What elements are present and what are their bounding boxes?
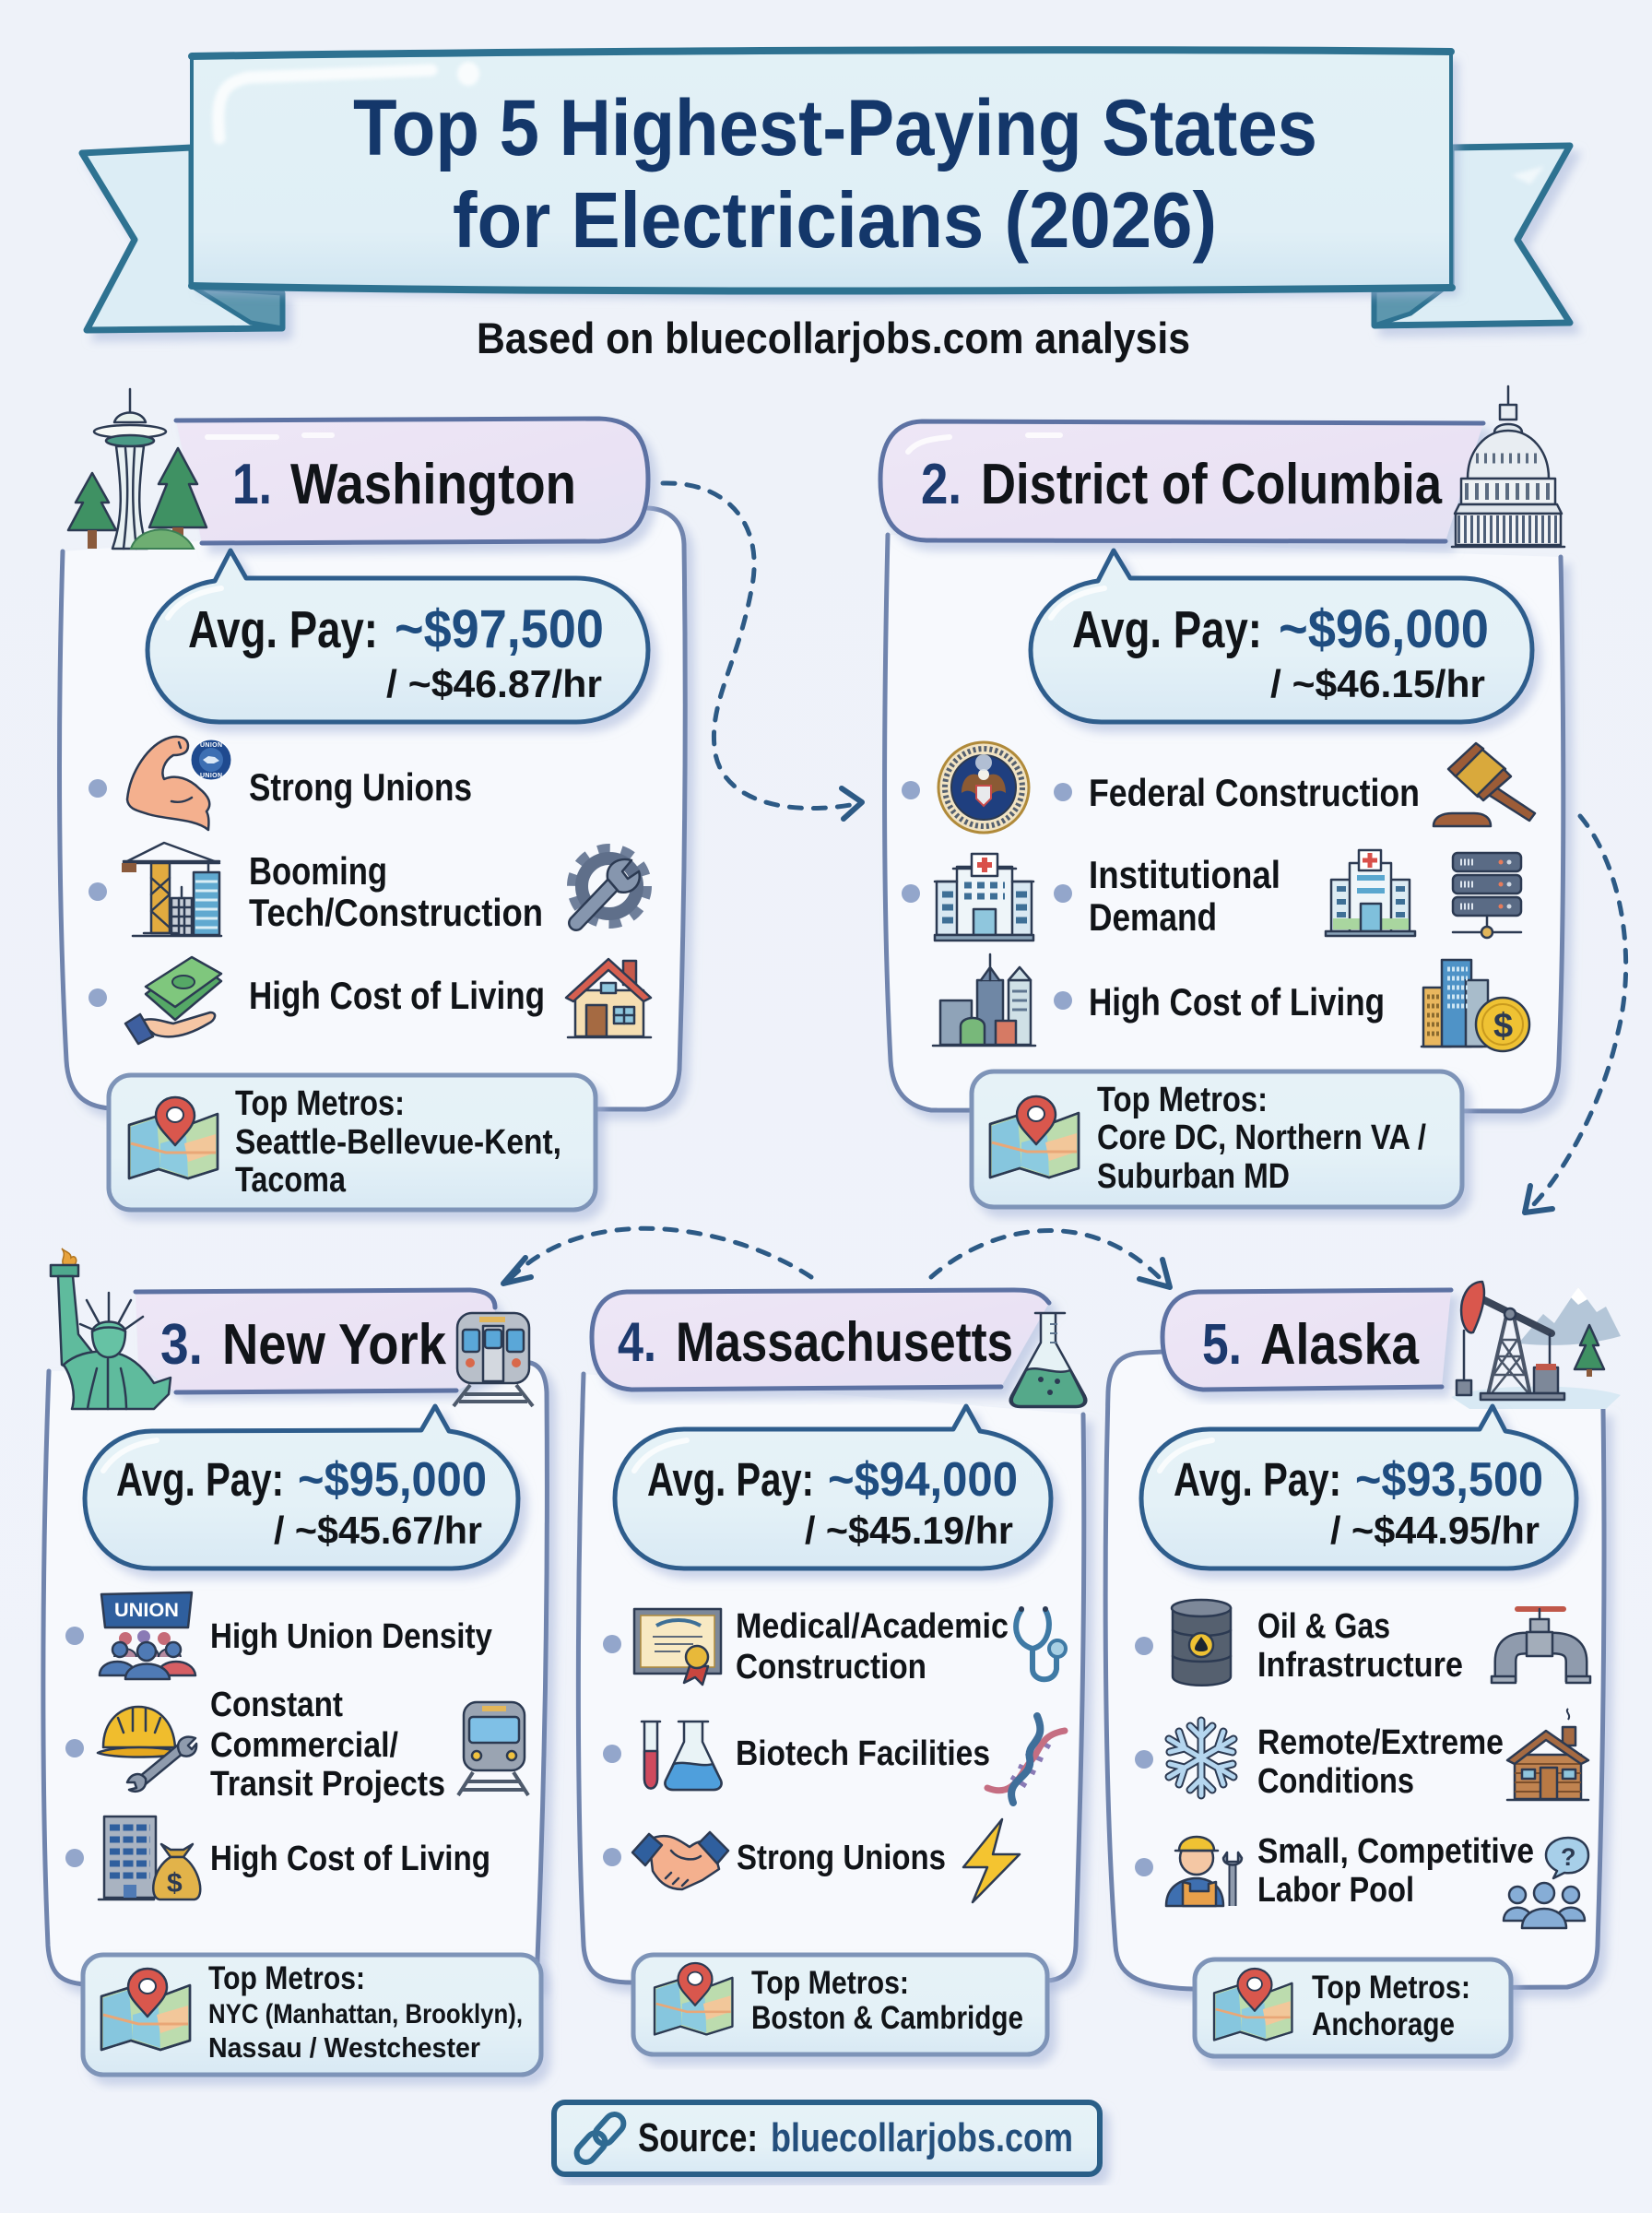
title text: Top 5 Highest-Paying States [353, 84, 1317, 172]
list item: Biotech Facilities [603, 1716, 1065, 1803]
icon: Statue of Liberty [51, 1249, 171, 1409]
metros box: Massachusetts: Boston & Cambridge [751, 2000, 1023, 2036]
list item: Booming Tech/Construction [88, 843, 646, 936]
metros box: District of Columbia: Top Metros: [1097, 1081, 1268, 1119]
subtitle: Based on bluecollarjobs.com analysis [477, 314, 1190, 362]
heading: 2. District of Columbia [880, 421, 1483, 541]
title text [353, 84, 1317, 265]
heading: 3. New York [136, 1290, 495, 1392]
icon: union crowd with banner [100, 1592, 195, 1679]
callout: average pay: Avg. Pay: [116, 1453, 284, 1506]
icon: flexed arm with union badge [127, 737, 231, 830]
icon: office tower and money bag [99, 1817, 200, 1899]
list item: Remote/Extreme Conditions: Conditions [1257, 1762, 1414, 1801]
list item: Institutional Demand: Demand [1089, 895, 1217, 939]
heading: 5. Alaska [1162, 1290, 1451, 1390]
list item: Oil & Gas Infrastructure: Infrastructure [1257, 1646, 1463, 1685]
metros box: District of Columbia [972, 1071, 1462, 1207]
list item: Institutional Demand: Institutional [1089, 853, 1280, 896]
icon: certificate [634, 1609, 721, 1685]
callout: average pay: Avg. Pay: [647, 1453, 814, 1506]
list item: High Union Density [65, 1592, 492, 1679]
list item: Remote/Extreme Conditions: Remote/Extreme [1257, 1723, 1504, 1762]
callout: average pay [1031, 550, 1532, 722]
arrow: rank 2 to rank 3 [1525, 816, 1626, 1213]
heading: 1. Washington [176, 419, 648, 543]
metros box: New York: Top Metros: [208, 1960, 365, 1996]
heading: 4. Massachusetts: Massachusetts [676, 1311, 1013, 1373]
callout: average pay: / ~$45.67/hr [274, 1509, 482, 1552]
icon: house [566, 959, 651, 1037]
icon: buildings and dollar coin [1422, 960, 1529, 1051]
list item: Federal Construction [902, 742, 1535, 833]
metros box: New York: Nassau / Westchester [208, 2031, 480, 2064]
list item: Strong Unions: Strong Unions [249, 765, 472, 809]
list item: Booming Tech/Construction: Booming [249, 849, 387, 893]
icon: map pin [129, 1097, 218, 1178]
callout: average pay [148, 550, 648, 722]
icon: question bubble and people: ? [1561, 1843, 1576, 1871]
list item: Medical/Academic Construction: Construction [736, 1648, 926, 1686]
panel: New York [43, 1249, 547, 2075]
icon: crane and buildings [122, 843, 221, 936]
callout: average pay: Avg. Pay: [1174, 1453, 1341, 1506]
callout: average pay [85, 1406, 518, 1568]
icon: map pin [1214, 1969, 1292, 2040]
list item: Medical/Academic Construction [603, 1606, 1066, 1686]
list item: Booming Tech/Construction: Tech/Construction [249, 891, 543, 934]
list item: Oil & Gas Infrastructure [1135, 1600, 1590, 1686]
callout: average pay [1141, 1406, 1576, 1568]
heading: 4. Massachusetts [592, 1290, 1049, 1390]
icon: flexed arm with union badge: UNION [200, 742, 222, 749]
list item: Strong Unions [603, 1819, 1020, 1902]
arrow: rank 1 to rank 2 [663, 483, 862, 819]
list item: High Cost of Living: High Cost of Living [249, 974, 545, 1017]
heading: 3. New York: New York [222, 1313, 446, 1377]
metros box: Alaska: Anchorage [1312, 2006, 1455, 2042]
icon: map pin [101, 1969, 190, 2050]
icon: lab flask [1010, 1313, 1086, 1407]
list item: Oil & Gas Infrastructure: Oil & Gas [1257, 1607, 1390, 1646]
metros box: Washington: Tacoma [235, 1161, 347, 1200]
list item: Small, Competitive Labor Pool: Labor Pool [1257, 1871, 1414, 1910]
list item: High Cost of Living [933, 954, 1529, 1051]
list item: Federal Construction: Federal Construction [1089, 771, 1420, 814]
icon: pipeline valve [1492, 1609, 1590, 1683]
icon: snowflake [1169, 1721, 1233, 1795]
source footer: bluecollarjobs.com [771, 2115, 1073, 2160]
metros box: District of Columbia: Core DC, Northern VA / [1097, 1118, 1426, 1157]
heading: 1. Washington: 1. [232, 453, 272, 516]
heading: 2. District of Columbia: District of Columbia [981, 453, 1442, 516]
icon: map pin [990, 1096, 1079, 1178]
list item: Institutional Demand [902, 850, 1521, 941]
callout: average pay: Avg. Pay: [1072, 600, 1262, 659]
metros box: Massachusetts [633, 1955, 1047, 2054]
icon: flexed arm with union badge: UNION [200, 773, 222, 779]
callout: average pay [615, 1406, 1051, 1568]
list item: Constant Commercial/Transit Projects: Commercial/ [210, 1726, 398, 1765]
arrow: toward rank 5 [931, 1231, 1170, 1287]
metros box: Washington: Top Metros: [235, 1084, 405, 1123]
list item: Constant Commercial/Transit Projects [65, 1686, 528, 1804]
icon: hospital building [1326, 850, 1415, 936]
list item: Small, Competitive Labor Pool: Small, Competitive [1257, 1832, 1534, 1871]
icon: office tower and money bag: $ [167, 1868, 183, 1899]
icon: gear and wrench [572, 849, 646, 923]
callout: average pay: ~$94,000 [828, 1453, 1018, 1507]
icon: buildings and dollar coin: $ [1493, 1007, 1513, 1046]
icon: question bubble and people [1504, 1838, 1588, 1928]
metros box: Washington: Seattle-Bellevue-Kent, [235, 1123, 561, 1162]
list item: High Cost of Living [65, 1817, 490, 1899]
icon: subway train [454, 1313, 533, 1406]
icon: oil pump and snowy mountains [1451, 1282, 1621, 1409]
list item: Strong Unions [88, 737, 472, 830]
icon: worker with hard hat [1166, 1837, 1242, 1906]
callout: average pay: / ~$46.15/hr [1270, 662, 1485, 705]
icon: oil barrel [1172, 1600, 1231, 1686]
list item: Strong Unions: Strong Unions [737, 1839, 946, 1877]
icon: hard hat and wrench [98, 1707, 196, 1792]
list item: Biotech Facilities: Biotech Facilities [736, 1734, 990, 1773]
icon: handshake [632, 1832, 728, 1889]
metros box: New York: NYC (Manhattan, Brooklyn), [208, 1999, 523, 2030]
heading: 5. Alaska: 5. [1202, 1313, 1242, 1377]
heading: 5. Alaska: Alaska [1260, 1313, 1419, 1377]
icon: cash on open hand [125, 957, 221, 1044]
icon: test tube and beaker [642, 1722, 722, 1790]
list item: High Cost of Living: High Cost of Living [1089, 980, 1385, 1024]
heading: 4. Massachusetts: 4. [618, 1311, 656, 1373]
icon: federal seal [938, 742, 1029, 833]
metros box: Washington [109, 1075, 596, 1210]
metros box: Alaska [1195, 1959, 1511, 2056]
icon: gavel [1434, 743, 1535, 826]
icon: hospital [935, 854, 1033, 941]
metros box: District of Columbia: Suburban MD [1097, 1157, 1290, 1196]
callout: average pay: ~$93,500 [1355, 1453, 1543, 1507]
callout: average pay: / ~$45.19/hr [805, 1509, 1013, 1552]
source footer [554, 2102, 1100, 2174]
panel: Alaska [1105, 1282, 1621, 2056]
callout: average pay: / ~$44.95/hr [1330, 1509, 1540, 1552]
icon: Capitol dome [1452, 386, 1564, 547]
panel: Massachusetts [578, 1290, 1086, 2054]
source footer: Source: [638, 2115, 758, 2160]
arrow: toward rank 3 [503, 1228, 811, 1284]
list item: High Cost of Living: High Cost of Living [210, 1840, 490, 1878]
heading: 3. New York: 3. [160, 1313, 203, 1377]
list item: Remote/Extreme Conditions [1135, 1709, 1588, 1801]
callout: average pay: / ~$46.87/hr [386, 662, 602, 705]
list item: High Union Density: High Union Density [210, 1617, 492, 1656]
icon: Space Needle and trees [68, 389, 206, 549]
icon: map pin [655, 1963, 732, 2034]
panel: District of Columbia [880, 386, 1564, 1207]
callout: average pay: ~$95,000 [298, 1453, 487, 1507]
icon: log cabin [1507, 1709, 1588, 1800]
icon: commuter train [458, 1702, 528, 1795]
list item: Small, Competitive Labor Pool [1135, 1832, 1588, 1928]
metros box: Alaska: Top Metros: [1312, 1970, 1470, 2006]
metros box: Massachusetts: Top Metros: [751, 1965, 909, 2001]
callout: average pay: Avg. Pay: [188, 600, 378, 659]
callout: average pay: ~$97,500 [395, 599, 604, 659]
heading: 2. District of Columbia: 2. [921, 453, 962, 516]
list item: Constant Commercial/Transit Projects: Constant [210, 1686, 343, 1724]
list item: High Cost of Living [88, 957, 651, 1044]
icon: lightning bolt [963, 1819, 1020, 1902]
icon: server rack [1453, 853, 1521, 938]
icon: union crowd with banner: UNION [114, 1600, 179, 1621]
heading: 1. Washington: Washington [290, 453, 576, 516]
title text: for Electricians (2026) [453, 177, 1217, 265]
title ribbon banner [82, 50, 1570, 330]
list item: Medical/Academic Construction: Medical/Academic [736, 1607, 1009, 1646]
icon: city skyline [933, 954, 1035, 1046]
metros box: New York [83, 1955, 541, 2075]
callout: average pay: ~$96,000 [1279, 599, 1489, 659]
icon: stethoscope [1016, 1606, 1066, 1679]
panel: Washington [60, 389, 685, 1210]
icon: DNA helix [987, 1716, 1065, 1803]
icon: chain link [573, 2111, 627, 2166]
list item: Constant Commercial/Transit Projects: Transit Projects [210, 1765, 445, 1804]
